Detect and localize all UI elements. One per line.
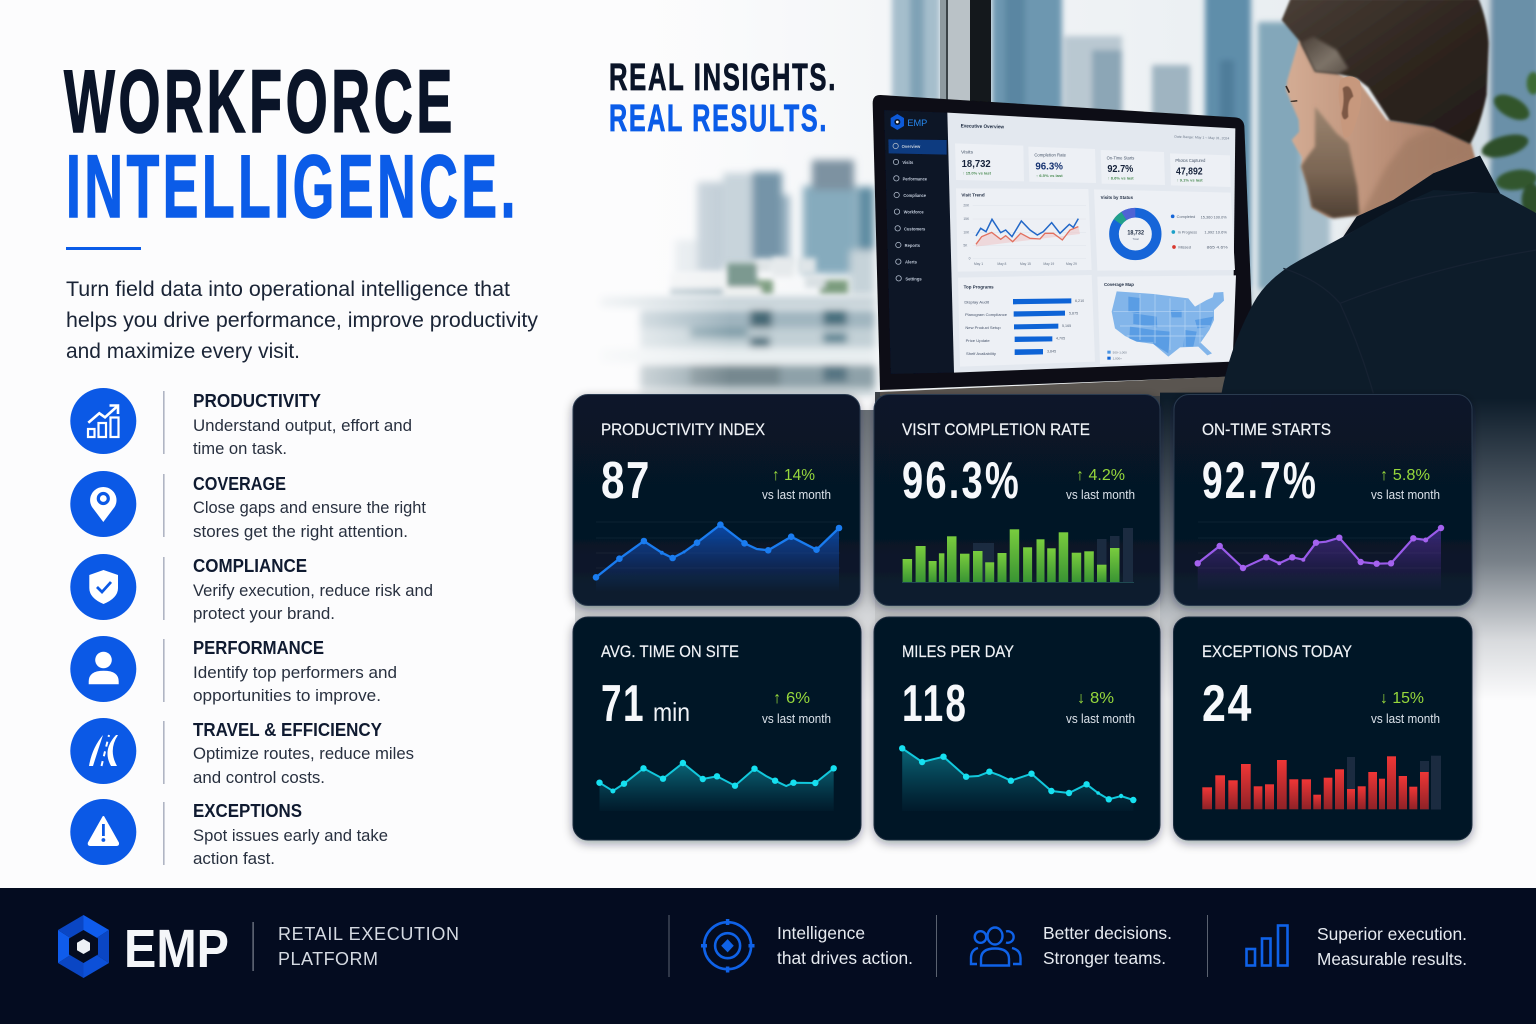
panel: average time on site [573,617,861,840]
dashboard top programs bars [958,275,1095,367]
text: execution [1317,924,1467,969]
title [64,51,519,236]
icon: team [971,928,1020,966]
title line 1: WORKFORCE [64,51,456,151]
panel: visit completion rate: VISIT COMPLETION RATE [902,421,1090,439]
dashboard stat cards: On-Time Starts [1107,155,1134,160]
panel: miles per day: MILES PER DAY [902,643,1014,661]
panel: productivity index [573,394,860,606]
item: productivity: time on task. [193,439,287,458]
secondary headline [609,57,837,140]
panel: miles per day: ↓ 8% [1077,690,1114,707]
panel: productivity index: PRODUCTIVITY INDEX [601,421,765,439]
item: travel and efficiency: and control costs. [193,768,325,787]
dashboard stat cards: ↑ 15.0% vs last [963,172,992,176]
dashboard coverage map: 1,000+ [1113,356,1122,360]
item: compliance: Verify execution, reduce risk and [193,581,433,600]
logo wordmark: EMP [124,919,229,979]
panel: on-time starts: ↑ 5.8% [1380,467,1430,484]
dashboard sidebar: Compliance [903,193,926,198]
item: performance: Identify top performers and [193,663,397,682]
dashboard sidebar: Visits [902,160,914,165]
item: compliance [70,554,433,623]
item: compliance: protect your brand. [193,604,335,623]
item: performance: opportunities to improve. [193,686,381,705]
dashboard top programs bars: 3,845 [1047,350,1056,354]
dashboard visit trend chart: 20K [963,204,970,208]
window frame [940,0,991,105]
panel: visit completion rate [874,394,1160,606]
low rooftops and trees [670,257,848,300]
dashboard stat cards: ↑ 8.6% vs last [1108,177,1135,181]
neck shadow [1343,127,1471,237]
shirt [1160,156,1536,700]
text: execution: Measurable results. [1317,949,1467,969]
panel: productivity index: vs last month [762,487,831,502]
icon: rising bars [1246,926,1288,966]
panel: exceptions today [1174,617,1472,840]
text: decisions: Better decisions. [1043,923,1172,943]
dashboard visit trend chart: May 29 [1066,262,1077,266]
face and neck [1286,37,1480,240]
dashboard visit trend chart: 0 [969,257,971,261]
panel: productivity index: ↑ 14% [772,467,815,484]
text: intelligence: that drives action. [777,948,913,968]
intro paragraph: Turn field data into operational intelligence that [66,278,510,301]
benefit list [70,388,433,868]
fade of lower photo behind the cards [560,398,1536,701]
dashboard visit trend chart: 5K [963,244,968,248]
beard [1301,107,1359,218]
platform tagline [278,924,459,969]
dashboard visits by status donut: Total [1133,237,1139,241]
item: travel and efficiency: Optimize routes, reduce miles [193,744,414,763]
office photo: blurred city skyline [600,0,1536,396]
item: exceptions: action fast. [193,849,275,868]
item: exceptions [70,799,388,868]
dashboard visit trend chart: 15K [963,217,970,221]
text: decisions: Stronger teams. [1043,948,1166,968]
dashboard top programs bars: Top Programs [964,284,994,289]
dashboard stat cards: Visits [961,149,973,154]
dashboard stat cards: 18,732 [962,159,991,170]
panel: productivity index: 87 [601,452,651,510]
dashboard stat cards: 96.3% [1035,162,1063,173]
panel: visit completion rate: ↑ 4.2% [1076,467,1125,484]
dashboard top programs bars: Shelf Availability [966,351,996,356]
text: intelligence [777,923,913,968]
panel: miles per day [874,617,1160,840]
distant towers [675,160,874,295]
panel: average time on site: vs last month [762,711,831,726]
panel: miles per day: 118 [902,675,968,733]
dashboard stat cards: ↑ 6.5% vs last [1036,174,1064,178]
panel: average time on site: min [653,697,690,727]
monitor [873,95,1254,396]
dashboard sidebar [884,110,954,374]
dashboard visit trend chart: May 8 [997,262,1007,266]
dashboard visit trend chart: 10K [963,230,970,234]
dashboard sidebar: Alerts [905,260,917,265]
desk behind cards [575,392,1536,700]
dashboard stat cards: Photos Captured [1175,158,1206,163]
panel: exceptions today: 24 [1202,675,1253,733]
panel: visit completion rate: 96.3% [902,452,1021,510]
dashboard sidebar: Settings [905,276,922,281]
panel: on-time starts: vs last month [1371,487,1440,502]
dashboard visit trend chart [956,188,1092,272]
fade of photo into white [540,0,730,400]
dashboard stat cards: ↑ 9.1% vs last [1177,178,1204,182]
dashboard sidebar: EMP [907,118,927,128]
item: exceptions: Spot issues early and take [193,826,388,845]
text: decisions [1043,923,1172,968]
item: coverage: COVERAGE [193,474,286,494]
bar chart: completion [902,528,1134,582]
dashboard top programs bars: Price Update [966,338,990,343]
line chart: miles [899,745,1137,811]
panel: on-time starts [1174,394,1472,606]
item: performance: PERFORMANCE [193,638,324,658]
monitor frame [880,376,1240,396]
dashboard coverage map [1097,275,1236,364]
accent rule [66,247,141,250]
platform tagline: RETAIL EXECUTION [278,924,459,944]
plant [1479,72,1536,217]
intro paragraph: and maximize every visit. [66,340,300,363]
panel: exceptions today: vs last month [1371,711,1440,726]
balcony railing bands [600,297,875,396]
panel: visit completion rate: vs last month [1066,487,1135,502]
dashboard stat cards [955,143,1231,187]
item: productivity: Understand output, effort and [193,416,412,435]
dashboard visits by status donut: Missed [1178,245,1191,250]
ear [1338,76,1361,138]
item: coverage: Close gaps and ensure the right [193,498,426,517]
panel: on-time starts: ON-TIME STARTS [1202,421,1331,439]
panel: average time on site: 71 [601,675,645,733]
bar chart: exceptions [1202,756,1441,810]
line chart: time on site [596,760,837,811]
dashboard visits by status donut: 865 4.6% [1207,245,1228,250]
dashboard content: Date Range: May 1 – May 31, 2024 [1174,135,1230,141]
dashboard stat cards: 47,892 [1176,166,1203,177]
title line 2: INTELLIGENCE. [66,136,519,236]
item: exceptions: EXCEPTIONS [193,801,302,821]
item: productivity [70,388,412,458]
dashboard top programs bars: Planogram Compliance [965,312,1008,317]
dashboard sidebar: Performance [903,177,927,182]
logo: EMP hexagon [58,915,109,978]
dashboard content: Executive Overview [961,123,1004,130]
dashboard visit trend chart: May 15 [1020,262,1031,266]
item: compliance: COMPLIANCE [193,556,307,576]
dashboard visit trend chart: Visit Trend [961,192,985,197]
dashboard visit trend chart: May 1 [974,262,983,266]
panel: exceptions today: ↓ 15% [1380,690,1424,707]
intro paragraph: helps you drive performance, improve productivity [66,309,539,332]
item: travel and efficiency [70,718,414,787]
dashboard visits by status donut: In Progress [1178,230,1197,235]
line chart: on-time starts [1194,522,1444,590]
item: coverage: stores get the right attention. [193,522,408,541]
dashboard sidebar: Overview [902,144,921,149]
dashboard content [947,113,1236,373]
dashboard sidebar: Customers [904,226,926,231]
dashboard visit trend chart: May 19 [1043,262,1054,266]
dashboard stat cards: Completion Rate [1034,153,1067,158]
dashboard stat cards: 92.7% [1107,164,1134,175]
secondary headline: REAL INSIGHTS. [609,57,837,99]
dashboard visits by status donut: Visits by Status [1101,195,1133,200]
platform tagline: PLATFORM [278,949,378,969]
dashboard top programs bars: 6,210 [1075,299,1084,303]
man looking at the monitor [1160,0,1536,700]
dashboard sidebar: Workforce [904,210,924,215]
dashboard top programs bars: New Product Setup [965,325,1001,330]
dashboard coverage map: Coverage Map [1104,282,1134,287]
icon: target [701,919,754,972]
dashboard visits by status donut: 18,732 [1127,230,1145,236]
panel: exceptions today: EXCEPTIONS TODAY [1202,643,1352,661]
panel: average time on site: AVG. TIME ON SITE [601,643,739,661]
dashboard visits by status donut: 15,360 100.0% [1201,214,1227,219]
dashboard top programs bars: Display Audit [964,300,990,305]
item: travel and efficiency: TRAVEL & EFFICIENCY [193,720,382,740]
line chart: productivity [593,521,842,592]
text: execution: Superior execution. [1317,924,1467,944]
dashboard visits by status donut [1094,189,1235,271]
hair [1282,0,1489,144]
dashboard top programs bars: 5,165 [1062,324,1071,328]
intro paragraph [66,278,539,363]
text: intelligence: Intelligence [777,923,865,943]
secondary headline: REAL RESULTS. [609,98,828,140]
dashboard sidebar: Reports [905,243,920,248]
panel: average time on site: ↑ 6% [773,690,810,707]
dashboard top programs bars: 5,875 [1069,311,1078,315]
dashboard visits by status donut: 1,992 10.6% [1204,230,1227,235]
dashboard visits by status donut: Completed [1177,214,1195,219]
item: performance [70,636,397,705]
dashboard coverage map: 500–1,000 [1113,350,1127,354]
panel: miles per day: vs last month [1066,711,1135,726]
right-hand skyline [892,0,1536,380]
item: coverage [70,471,426,541]
footer band [0,888,1536,1024]
panel: on-time starts: 92.7% [1202,452,1318,510]
item: productivity: PRODUCTIVITY [193,391,321,411]
dashboard top programs bars: 4,705 [1056,337,1065,341]
eye and brow [1286,86,1289,93]
